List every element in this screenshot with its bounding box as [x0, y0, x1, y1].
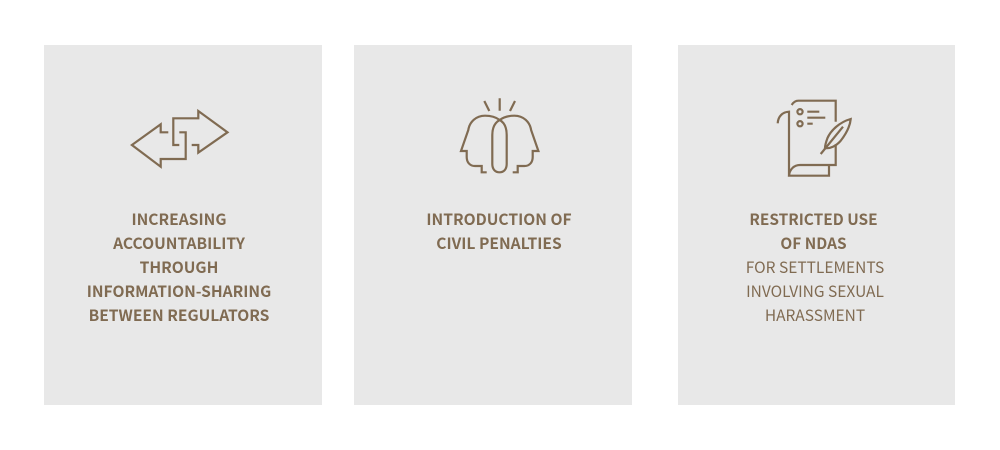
- text: civil penalties heading: CIVIL PENALTIES: [436, 232, 562, 254]
- text: restricted NDAs description: HARASSMENT: [765, 304, 865, 326]
- text: restricted NDAs description: FOR SETTLEMENTS: [746, 256, 884, 278]
- text: information sharing heading: INCREASING: [131, 208, 226, 230]
- text: information sharing heading: BETWEEN REGULATORS: [89, 304, 269, 326]
- icon: exchange arrows: [132, 111, 228, 167]
- text: restricted NDAs description: RESTRICTED USE: [749, 208, 878, 230]
- panel: information sharing: [44, 45, 322, 405]
- text: information sharing heading: ACCOUNTABILITY: [113, 232, 245, 254]
- text: civil penalties heading: INTRODUCTION OF: [426, 208, 572, 230]
- text: restricted NDAs description: [746, 208, 884, 326]
- icon: two heads: [461, 98, 538, 172]
- text: restricted NDAs description: INVOLVING SEXUAL: [746, 280, 884, 302]
- icon: document and quill: [778, 101, 851, 176]
- text: information sharing heading: THROUGH: [140, 256, 218, 278]
- panel: civil penalties: [354, 45, 632, 405]
- panel: restricted NDAs: [678, 45, 955, 405]
- text: information sharing heading: [87, 208, 271, 326]
- text: restricted NDAs description: OF NDAS: [780, 232, 847, 254]
- text: civil penalties heading: [426, 208, 572, 254]
- text: information sharing heading: INFORMATION-SHARING: [87, 280, 271, 302]
